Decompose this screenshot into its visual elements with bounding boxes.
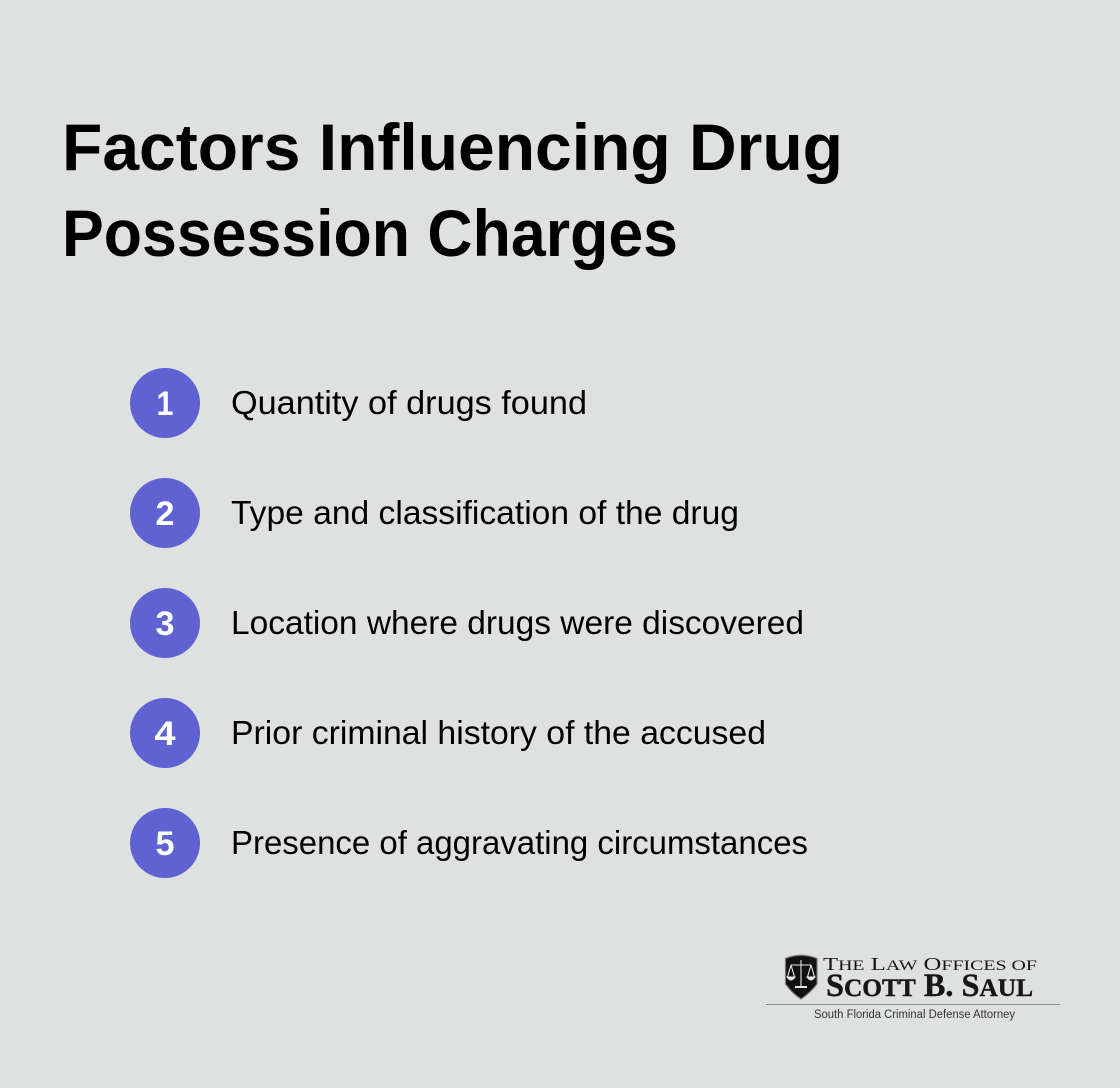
icon: shield with scales (786, 955, 817, 999)
list of factors (130, 368, 808, 878)
logo text: T HE L AW O FFICES OF (823, 954, 1037, 974)
logo: law offices (766, 954, 1060, 1021)
list item 4: Prior criminal history of the accused (231, 714, 766, 751)
list item 5 (130, 808, 808, 878)
logo text: South Florida Criminal Defense Attorney (814, 1009, 1015, 1021)
title: Possession Charges (62, 196, 678, 270)
list item 1: Quantity of drugs found (231, 384, 587, 421)
list item 5: 5 (156, 825, 174, 863)
title (62, 110, 843, 270)
list item 1 (130, 368, 587, 438)
list item 3 (130, 588, 804, 658)
list item 2: 2 (156, 495, 174, 533)
title: Factors Influencing Drug (62, 110, 843, 184)
logo text (766, 954, 1060, 1021)
logo text: SCOTT B. SAUL (826, 968, 1033, 1004)
list item 4 (130, 698, 766, 768)
list item 5: Presence of aggravating circumstances (231, 824, 808, 861)
list item 3: 3 (156, 605, 174, 643)
list item 2 (130, 478, 739, 548)
list item 4: 4 (154, 715, 176, 753)
list item 1: 1 (156, 385, 174, 423)
list item 3: Location where drugs were discovered (231, 604, 804, 641)
list item 2: Type and classification of the drug (231, 494, 739, 531)
